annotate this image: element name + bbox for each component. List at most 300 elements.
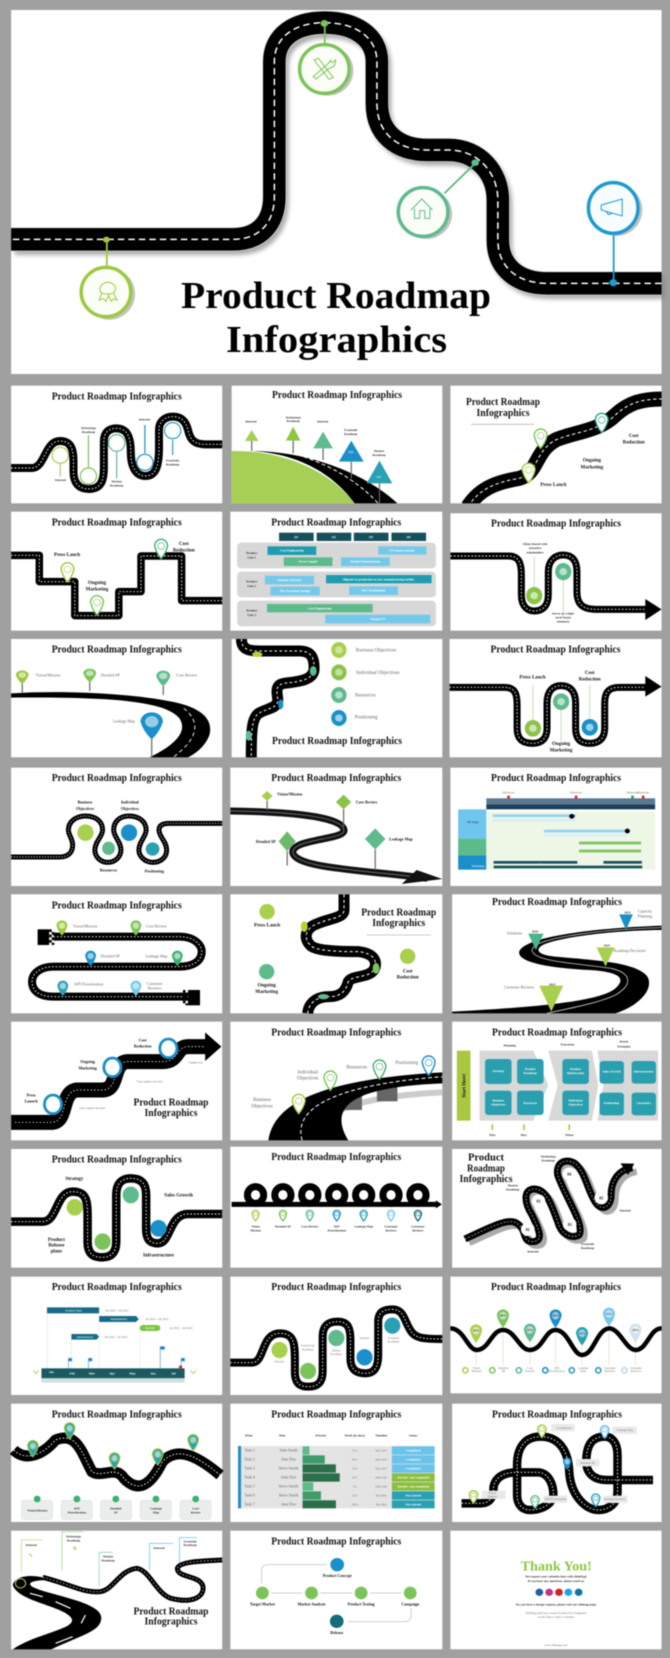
labels: Marketing [86, 588, 109, 593]
labels: Internal [360, 1336, 369, 1340]
title: Product Roadmap Infographics [272, 389, 403, 401]
labels: Leakage Map [617, 1428, 633, 1432]
labels: Positioning [355, 716, 378, 721]
labels: Positioning [145, 869, 164, 874]
title: Product Roadmap Infographics [52, 899, 182, 911]
table text: 100 h [351, 1502, 359, 1506]
labels: Frontside [166, 459, 180, 463]
divider [367, 934, 431, 936]
flags [68, 1347, 185, 1368]
panel: slide 9 road with arrow and three stops [450, 639, 662, 757]
labels: level visual [556, 615, 571, 619]
labels: Marketing [255, 990, 279, 995]
gantt bars [493, 814, 642, 868]
labels: Detailed SP [580, 1461, 595, 1465]
milestone flags [507, 796, 644, 799]
title: Infographics [476, 407, 530, 419]
title [134, 1605, 208, 1628]
flow text: Infrastructure [634, 1069, 654, 1073]
labels [73, 924, 167, 990]
labels: Technology [301, 1344, 315, 1348]
labels: Press [27, 1092, 36, 1097]
labels: Internal [139, 418, 150, 422]
start and finish flags [38, 929, 200, 1005]
percentages and labels: Leakage [578, 1366, 589, 1370]
title: Roadmap [467, 1163, 505, 1175]
table text: Task 1 [244, 1447, 255, 1452]
labels: Market [112, 480, 123, 484]
flow text: Planning [504, 1044, 516, 1048]
table text: Completed [406, 1466, 421, 1470]
table text: 20 h [352, 1475, 358, 1479]
labels: Vision/Mission [27, 1508, 47, 1512]
title: Infographics [144, 1616, 198, 1628]
teal boxes [485, 1059, 656, 1115]
percentages and labels: Customer [604, 1366, 616, 1370]
message text: If you have any questions, please reach us [528, 1579, 585, 1583]
labels: Sales Growth [164, 1194, 193, 1199]
labels: Leakage Map [354, 1225, 373, 1229]
labels: Technology [66, 1535, 82, 1539]
labels: Core Review [146, 924, 167, 929]
message text: We respect your valuable time with SlideEgg! [525, 1575, 587, 1579]
labels: Feb [70, 1371, 75, 1375]
panel: slide 30 thank you [450, 1531, 662, 1649]
labels: 2026 [532, 930, 539, 934]
labels: Resources [100, 868, 118, 873]
table text: John Doe [281, 1474, 296, 1479]
title: Product Roadmap Infographics [271, 1535, 402, 1547]
road [11, 555, 222, 616]
flow text: Customers [636, 1101, 652, 1105]
milestone: tools [300, 20, 353, 96]
title: Product Roadmap Infographics [52, 1281, 182, 1293]
labels [25, 1038, 203, 1110]
plan text [246, 535, 415, 621]
flow arrows [262, 1565, 411, 1622]
panel: slide 15 perspective s-road [452, 894, 662, 1013]
labels [250, 1225, 425, 1233]
markers [15, 1547, 76, 1588]
panel: slide 16 staircase arrow road [11, 1022, 222, 1140]
panel: slide 4 stair road [11, 512, 222, 631]
labels [523, 542, 575, 623]
flow text: Execution [561, 1043, 575, 1047]
labels: Implementation [111, 1318, 128, 1321]
labels: Reduction [173, 549, 195, 554]
panel: slide 29 process flow [230, 1531, 442, 1649]
flow text [462, 1040, 654, 1137]
labels: Customer [411, 1225, 425, 1229]
labels: Reviews [148, 985, 162, 990]
road [32, 937, 202, 997]
flow text: Positioning [604, 1101, 620, 1105]
table text: Task 4 [244, 1474, 255, 1479]
title: Product Roadmap [134, 1605, 208, 1617]
table text: Jan1-Jan7 [375, 1457, 388, 1461]
labels: Jul 2021 - Jul 2022 [145, 1317, 169, 1321]
labels: Jun [150, 1371, 156, 1375]
table text: Task 7 [244, 1501, 255, 1506]
milestone: megaphone [588, 183, 642, 286]
percentages and labels: Detailed [498, 1366, 509, 1370]
labels: Objectives [121, 806, 139, 811]
labels: plans [51, 1249, 62, 1254]
blue rings [44, 1039, 177, 1114]
labels: 05 [599, 1195, 603, 1200]
labels: Reviews [385, 1229, 397, 1233]
labels: Roadmap [101, 1559, 115, 1563]
product lines [237, 543, 436, 626]
labels: SP [114, 1510, 118, 1514]
flow text: Release plan [567, 1071, 584, 1075]
labels: Release [48, 1244, 65, 1249]
table text: Priority [316, 1433, 327, 1437]
title: Product Roadmap [466, 396, 540, 408]
labels: Planning [638, 914, 652, 919]
labels: Frontside [581, 1242, 595, 1246]
labels: Roadmap [542, 1159, 555, 1163]
road [452, 926, 662, 1013]
labels: Strategy [65, 1177, 84, 1182]
social icons [535, 1589, 582, 1596]
percentages and labels: 10% [473, 1329, 479, 1333]
panel: slide 22 milestone timeline [11, 1277, 222, 1395]
road [268, 1072, 442, 1140]
panel: slide 27 interlaced loops [452, 1404, 662, 1522]
panel: slide 14 vertical winding road [230, 894, 442, 1013]
title: Product Roadmap Infographics [271, 772, 402, 784]
labels [506, 1154, 631, 1253]
labels: Serves as a high- [552, 611, 575, 615]
labels: Roadmap [110, 484, 124, 488]
divider [471, 423, 534, 425]
table text: Task 5 [244, 1483, 255, 1488]
road signs [245, 427, 392, 503]
title: Product Roadmap Infographics [491, 1281, 622, 1293]
labels: Positioning [395, 1061, 419, 1066]
plan text: Line 1 [247, 555, 256, 559]
milestone labels: By Stage [468, 820, 479, 824]
labels [245, 415, 386, 479]
panel: slide 28 road with brackets [11, 1531, 222, 1649]
nodes [256, 1558, 417, 1628]
dots [34, 1496, 199, 1502]
labels: Marketing [78, 1065, 97, 1070]
plan text: Cost Engineering [308, 606, 332, 610]
flow text: Business [492, 1099, 505, 1103]
labels [251, 1061, 419, 1109]
labels: Roadmap [331, 1352, 343, 1356]
panel: slide 2 hill with road signs [232, 386, 442, 503]
road [230, 1309, 442, 1387]
labels: Jan [49, 1370, 54, 1374]
row headers [458, 809, 486, 870]
labels: Roadmap [344, 432, 358, 436]
milestone labels: Milestone [570, 790, 583, 794]
labels: Ongoing [88, 581, 107, 586]
milestone labels: Milestone [637, 790, 650, 794]
panel: slide 24 wave with percentages [450, 1277, 662, 1393]
table text: Steve Smith [279, 1492, 298, 1497]
milestone: home [398, 159, 479, 239]
labels: May [129, 1371, 136, 1375]
hero road [11, 23, 665, 288]
panel: slide 8 vertical road with objectives [232, 639, 442, 757]
table text: Jane Doe [281, 1501, 296, 1506]
title: Product Roadmap Infographics [52, 644, 182, 656]
labels: Roadmap [184, 1543, 197, 1547]
labels: Core Review [176, 673, 197, 678]
quarter headers [279, 533, 426, 541]
labels: Jul 2021 - Jul 2022 [169, 1326, 193, 1330]
ticks [492, 1124, 569, 1130]
percentages and labels: Reviews [605, 1369, 616, 1373]
labels: Objectives [76, 806, 94, 811]
labels [355, 649, 399, 721]
title: Product Roadmap Infographics [492, 1408, 623, 1420]
plan text: NFC Enablement [362, 589, 386, 593]
percentages and labels [472, 1312, 642, 1373]
labels [48, 1177, 193, 1259]
table text: Steve Smith [279, 1465, 298, 1470]
plan text: Q1 [294, 535, 299, 539]
labels: Market [103, 1555, 114, 1559]
labels: 2025 [549, 983, 556, 987]
labels: Leakage Map [389, 837, 413, 842]
labels: Prioritization [68, 1510, 86, 1514]
labels [256, 791, 413, 844]
labels [250, 1573, 420, 1635]
labels: Big Push [145, 1327, 155, 1330]
panel: slide 21 numbered road [452, 1149, 662, 1268]
labels: Your sample text here [79, 1106, 106, 1110]
road [14, 1438, 220, 1486]
milestone labels: Milestone [626, 790, 639, 794]
table text: 25 h [352, 1448, 358, 1452]
labels: Technology [541, 1154, 556, 1158]
panel: slide 26 task table [230, 1404, 442, 1522]
percentages and labels: Mission [472, 1369, 482, 1373]
milestones [67, 1187, 167, 1250]
labels: Vision/Mission [36, 673, 60, 678]
table text: Not started [406, 1502, 421, 1506]
table text: Jan1-Jan7 [375, 1466, 388, 1470]
milestones [271, 1317, 401, 1380]
labels: Product Testing [348, 1601, 375, 1606]
percentages and labels: 20% [500, 1314, 506, 1318]
labels [487, 1426, 633, 1501]
table text: Task 6 [244, 1492, 255, 1497]
title [466, 396, 540, 419]
title: Product Roadmap Infographics [52, 1154, 182, 1166]
labels: Internal [527, 1249, 539, 1253]
milestone labels [468, 790, 650, 868]
labels: Customer [384, 1225, 398, 1229]
labels: Core Review [556, 1426, 573, 1430]
percentages and labels: 15% [527, 1328, 533, 1332]
flow text: Individual [569, 1099, 583, 1103]
title: Product Roadmap Infographics [52, 772, 182, 784]
message text: www.slideegg.com [545, 1643, 568, 1647]
labels: Mar [89, 1371, 95, 1375]
plan text: Line 3 [247, 613, 256, 617]
labels: Apr [109, 1371, 115, 1375]
labels: Market [508, 1184, 519, 1188]
labels: Business Objectives [356, 649, 396, 654]
pillars [341, 1086, 397, 1110]
labels: Roadmap [506, 1188, 520, 1192]
labels: Core Review [301, 1225, 319, 1229]
labels: Roadmap [166, 463, 179, 467]
diamond signs [262, 791, 385, 870]
plan text: Product [246, 551, 258, 555]
flow text: How [521, 1133, 528, 1137]
hero title [181, 275, 491, 361]
labels: Internal [245, 419, 257, 423]
table text: Task 3 [244, 1465, 255, 1470]
table text: Mar-Mar [376, 1493, 387, 1497]
table text: Jan1-Jan7 [375, 1448, 388, 1452]
table text: 50 h [352, 1466, 358, 1470]
labels: Detailed [110, 1506, 122, 1510]
table text: Started - not completed [397, 1484, 429, 1488]
percentages and labels: 15% [606, 1312, 612, 1316]
balloons [470, 1308, 642, 1345]
labels: Market [374, 449, 385, 453]
labels: Detailed SP [275, 1225, 291, 1229]
pole pins [16, 669, 170, 757]
labels: KPI [334, 1225, 340, 1229]
labels: Ongoing [552, 742, 571, 747]
plan text: UX Improvements [390, 549, 415, 553]
priority bars [303, 1446, 340, 1508]
percentages and labels: Customer [630, 1366, 642, 1370]
table text: Mar-Mar [376, 1502, 387, 1506]
hero title: Product Roadmap [181, 275, 491, 317]
percentages and labels: Vision [473, 1366, 481, 1370]
road with arrow [450, 555, 662, 620]
plan text: Mobile Enhancements [350, 560, 381, 564]
guide lines [47, 1313, 140, 1368]
labels: Map [153, 1510, 159, 1514]
table text: Started - not completed [397, 1475, 429, 1479]
panel: slide 20 tyres timeline [230, 1147, 442, 1268]
road [468, 399, 667, 507]
labels: 04 [567, 1172, 571, 1177]
table text: Work (in days) [345, 1433, 365, 1437]
flow text: Product [570, 1067, 582, 1071]
table text: 40 h [352, 1457, 358, 1461]
labels [55, 418, 180, 488]
flow text: When [565, 1133, 573, 1137]
labels: Roadmap [67, 1539, 80, 1543]
milestone: award [81, 237, 135, 320]
panel: slide 23 winding road five stops [230, 1277, 442, 1395]
road [11, 816, 222, 862]
labels: Customer Reviews [504, 984, 535, 989]
table text: Jan8-Jan9 [375, 1484, 388, 1488]
labels: Roadmap [82, 430, 95, 434]
panel: slide 19 road with four stops [11, 1149, 222, 1268]
labels: Individual Objectives [356, 671, 399, 676]
labels: Resources [347, 1065, 367, 1070]
labels: Internal [153, 1546, 165, 1550]
pins [292, 1056, 435, 1114]
labels: Objectives [251, 1104, 273, 1109]
tyres [247, 1187, 426, 1203]
status cells [392, 1446, 435, 1508]
table text: Jan8-Jan9 [375, 1475, 388, 1479]
labels: Reviews [412, 1229, 424, 1233]
labels: Market Analysis [297, 1601, 326, 1606]
labels: Reduction [134, 1043, 152, 1048]
table text: John Smith [279, 1447, 298, 1452]
labels: Frontside [184, 1539, 197, 1543]
labels: Jul [171, 1371, 176, 1375]
labels: Mission [250, 1229, 261, 1233]
labels: Customer [147, 981, 163, 986]
plan text: Cost Engineering [280, 549, 304, 553]
labels: Objectives [297, 1076, 318, 1081]
flow text: Sales Growth [602, 1069, 621, 1073]
plan text: Design 3.0 [371, 617, 385, 621]
flow text: Product [525, 1067, 537, 1071]
wave road [450, 1328, 662, 1355]
timeline bars [47, 1307, 160, 1340]
labels: Business [253, 1098, 271, 1103]
labels: Press Lauch [254, 923, 280, 928]
title: Product Roadmap Infographics [52, 390, 182, 402]
title: Infographics [460, 1173, 513, 1185]
title: Product Roadmap Infographics [271, 516, 402, 528]
flow text: Objectives [568, 1103, 584, 1107]
hill [232, 451, 355, 503]
labels: Review [191, 1510, 201, 1514]
percentages and labels: 30% [552, 1314, 559, 1318]
labels: Capacity [638, 909, 652, 914]
percentages and labels: KPI [554, 1366, 559, 1370]
labels [26, 1535, 197, 1563]
title: Product Roadmap Infographics [52, 516, 182, 528]
percentages and labels: Map [581, 1369, 587, 1373]
table text: Completed [406, 1448, 421, 1452]
plan text: Updated Software [277, 578, 302, 582]
panel: slide 7 curved road with poles [11, 639, 222, 757]
road [462, 1437, 653, 1510]
labels: Roadmap [287, 419, 300, 423]
title: Product Roadmap Infographics [492, 896, 623, 908]
title: Product Roadmap Infographics [492, 1027, 623, 1039]
milestone labels: Marketing [472, 864, 485, 868]
labels: Roadmap Decisions [613, 948, 646, 953]
flow text: Reach [620, 1040, 628, 1044]
thank you heading: Thank You! [521, 1560, 592, 1575]
percentages and labels: Prioritization [549, 1369, 565, 1373]
labels: Roadmap [388, 1340, 400, 1344]
labels: Infrastructure [143, 1254, 175, 1259]
labels [540, 434, 645, 488]
labels: Internal [274, 1360, 284, 1364]
labels [27, 1506, 201, 1514]
labels: Leakage [150, 1506, 162, 1510]
labels: 03 [568, 1222, 572, 1227]
objective circles [331, 642, 347, 726]
under ramp [323, 1092, 442, 1125]
labels: Mission [487, 1494, 498, 1498]
table text: Timeline [375, 1433, 388, 1437]
plan text: Migrate to production to new manufacturing facility [343, 577, 415, 581]
